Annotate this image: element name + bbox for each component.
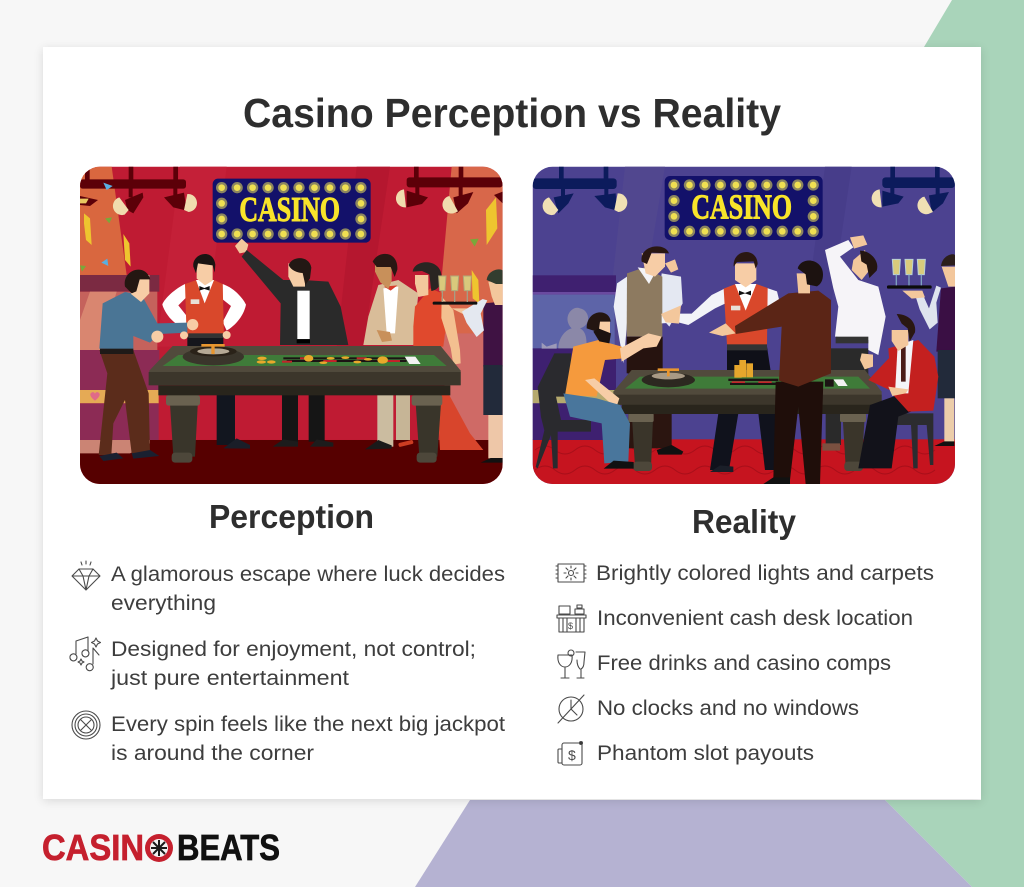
item: no clocks [558, 695, 859, 723]
seated man right [897, 413, 933, 425]
woman in red [437, 393, 483, 450]
seated man left [536, 353, 591, 468]
item: phantom payouts [558, 741, 814, 765]
heading: Reality: Reality [692, 503, 797, 540]
illustration: perception casino scene [80, 167, 503, 484]
text: bright lights: Brightly colored lights and carpets [596, 561, 934, 585]
logo wheel [145, 834, 173, 862]
logo word: BEATS: BEATS [177, 827, 280, 868]
dealer [217, 393, 235, 445]
text: free drinks: Free drinks and casino comps [597, 651, 891, 675]
item: bright lights [556, 561, 934, 585]
icon: cash desk [557, 605, 586, 632]
reality list [556, 561, 934, 765]
carpet [533, 439, 955, 484]
item: glamorous escape [72, 561, 505, 615]
text: glamorous escape: A glamorous escape where luck decides [111, 562, 505, 586]
item: designed for enjoyment [70, 637, 476, 690]
text: every spin: is around the corner [111, 741, 314, 765]
sign [213, 179, 371, 243]
man in brown from behind [773, 382, 823, 484]
text: designed for enjoyment: Designed for enjoyment, not control; [111, 637, 476, 661]
icon: patterned carpet [556, 564, 586, 582]
dollar glyph: $ [568, 621, 573, 631]
text: glamorous escape: everything [111, 591, 216, 615]
text: cash desk: Inconvenient cash desk location [597, 606, 913, 630]
tray and glasses [433, 302, 477, 305]
icon: music notes [70, 637, 100, 671]
illustration: perception casino scene: CASINO [239, 191, 340, 229]
logo word: CASIN: CASIN [42, 827, 144, 868]
white card panel [43, 47, 981, 799]
confetti [103, 183, 113, 190]
dollar glyph: $ [568, 747, 576, 763]
illustration: reality casino scene: CASINO [691, 188, 792, 226]
title: Casino Perception vs Reality [243, 90, 781, 136]
text: every spin: Every spin feels like the next big jackpot [111, 712, 505, 736]
light rigs [80, 167, 503, 213]
text: designed for enjoyment: just pure entertainment [110, 666, 349, 690]
beige man [377, 393, 393, 447]
perception list [70, 561, 505, 765]
item: free drinks [558, 650, 891, 678]
background shape: purple band [415, 800, 972, 887]
text: phantom payouts: Phantom slot payouts [597, 741, 814, 765]
cash booth [533, 275, 616, 292]
text: no clocks: No clocks and no windows [597, 696, 859, 720]
table [632, 422, 653, 463]
icon: diamond [72, 561, 100, 590]
illustration: reality casino scene [533, 167, 955, 484]
heading: Perception: Perception [209, 498, 374, 535]
sign [665, 176, 823, 240]
item: cash desk [557, 605, 913, 632]
icon: crossed clock [558, 695, 584, 723]
waitress [483, 302, 503, 367]
waitress [936, 287, 955, 352]
booth [80, 275, 159, 292]
dealer [727, 347, 770, 370]
white shirt man [831, 348, 868, 374]
logo: CasinoBeats [42, 827, 280, 868]
background shape: green corner [885, 0, 1024, 887]
man in black [282, 393, 298, 442]
man in vest [628, 373, 672, 448]
man in blue [99, 350, 150, 455]
icon: casino chip [72, 711, 100, 739]
icon: cocktail glasses [558, 650, 585, 678]
icon: phantom payout card [558, 742, 582, 765]
light rigs [533, 167, 955, 213]
item: every spin [72, 711, 505, 765]
table [169, 393, 198, 457]
